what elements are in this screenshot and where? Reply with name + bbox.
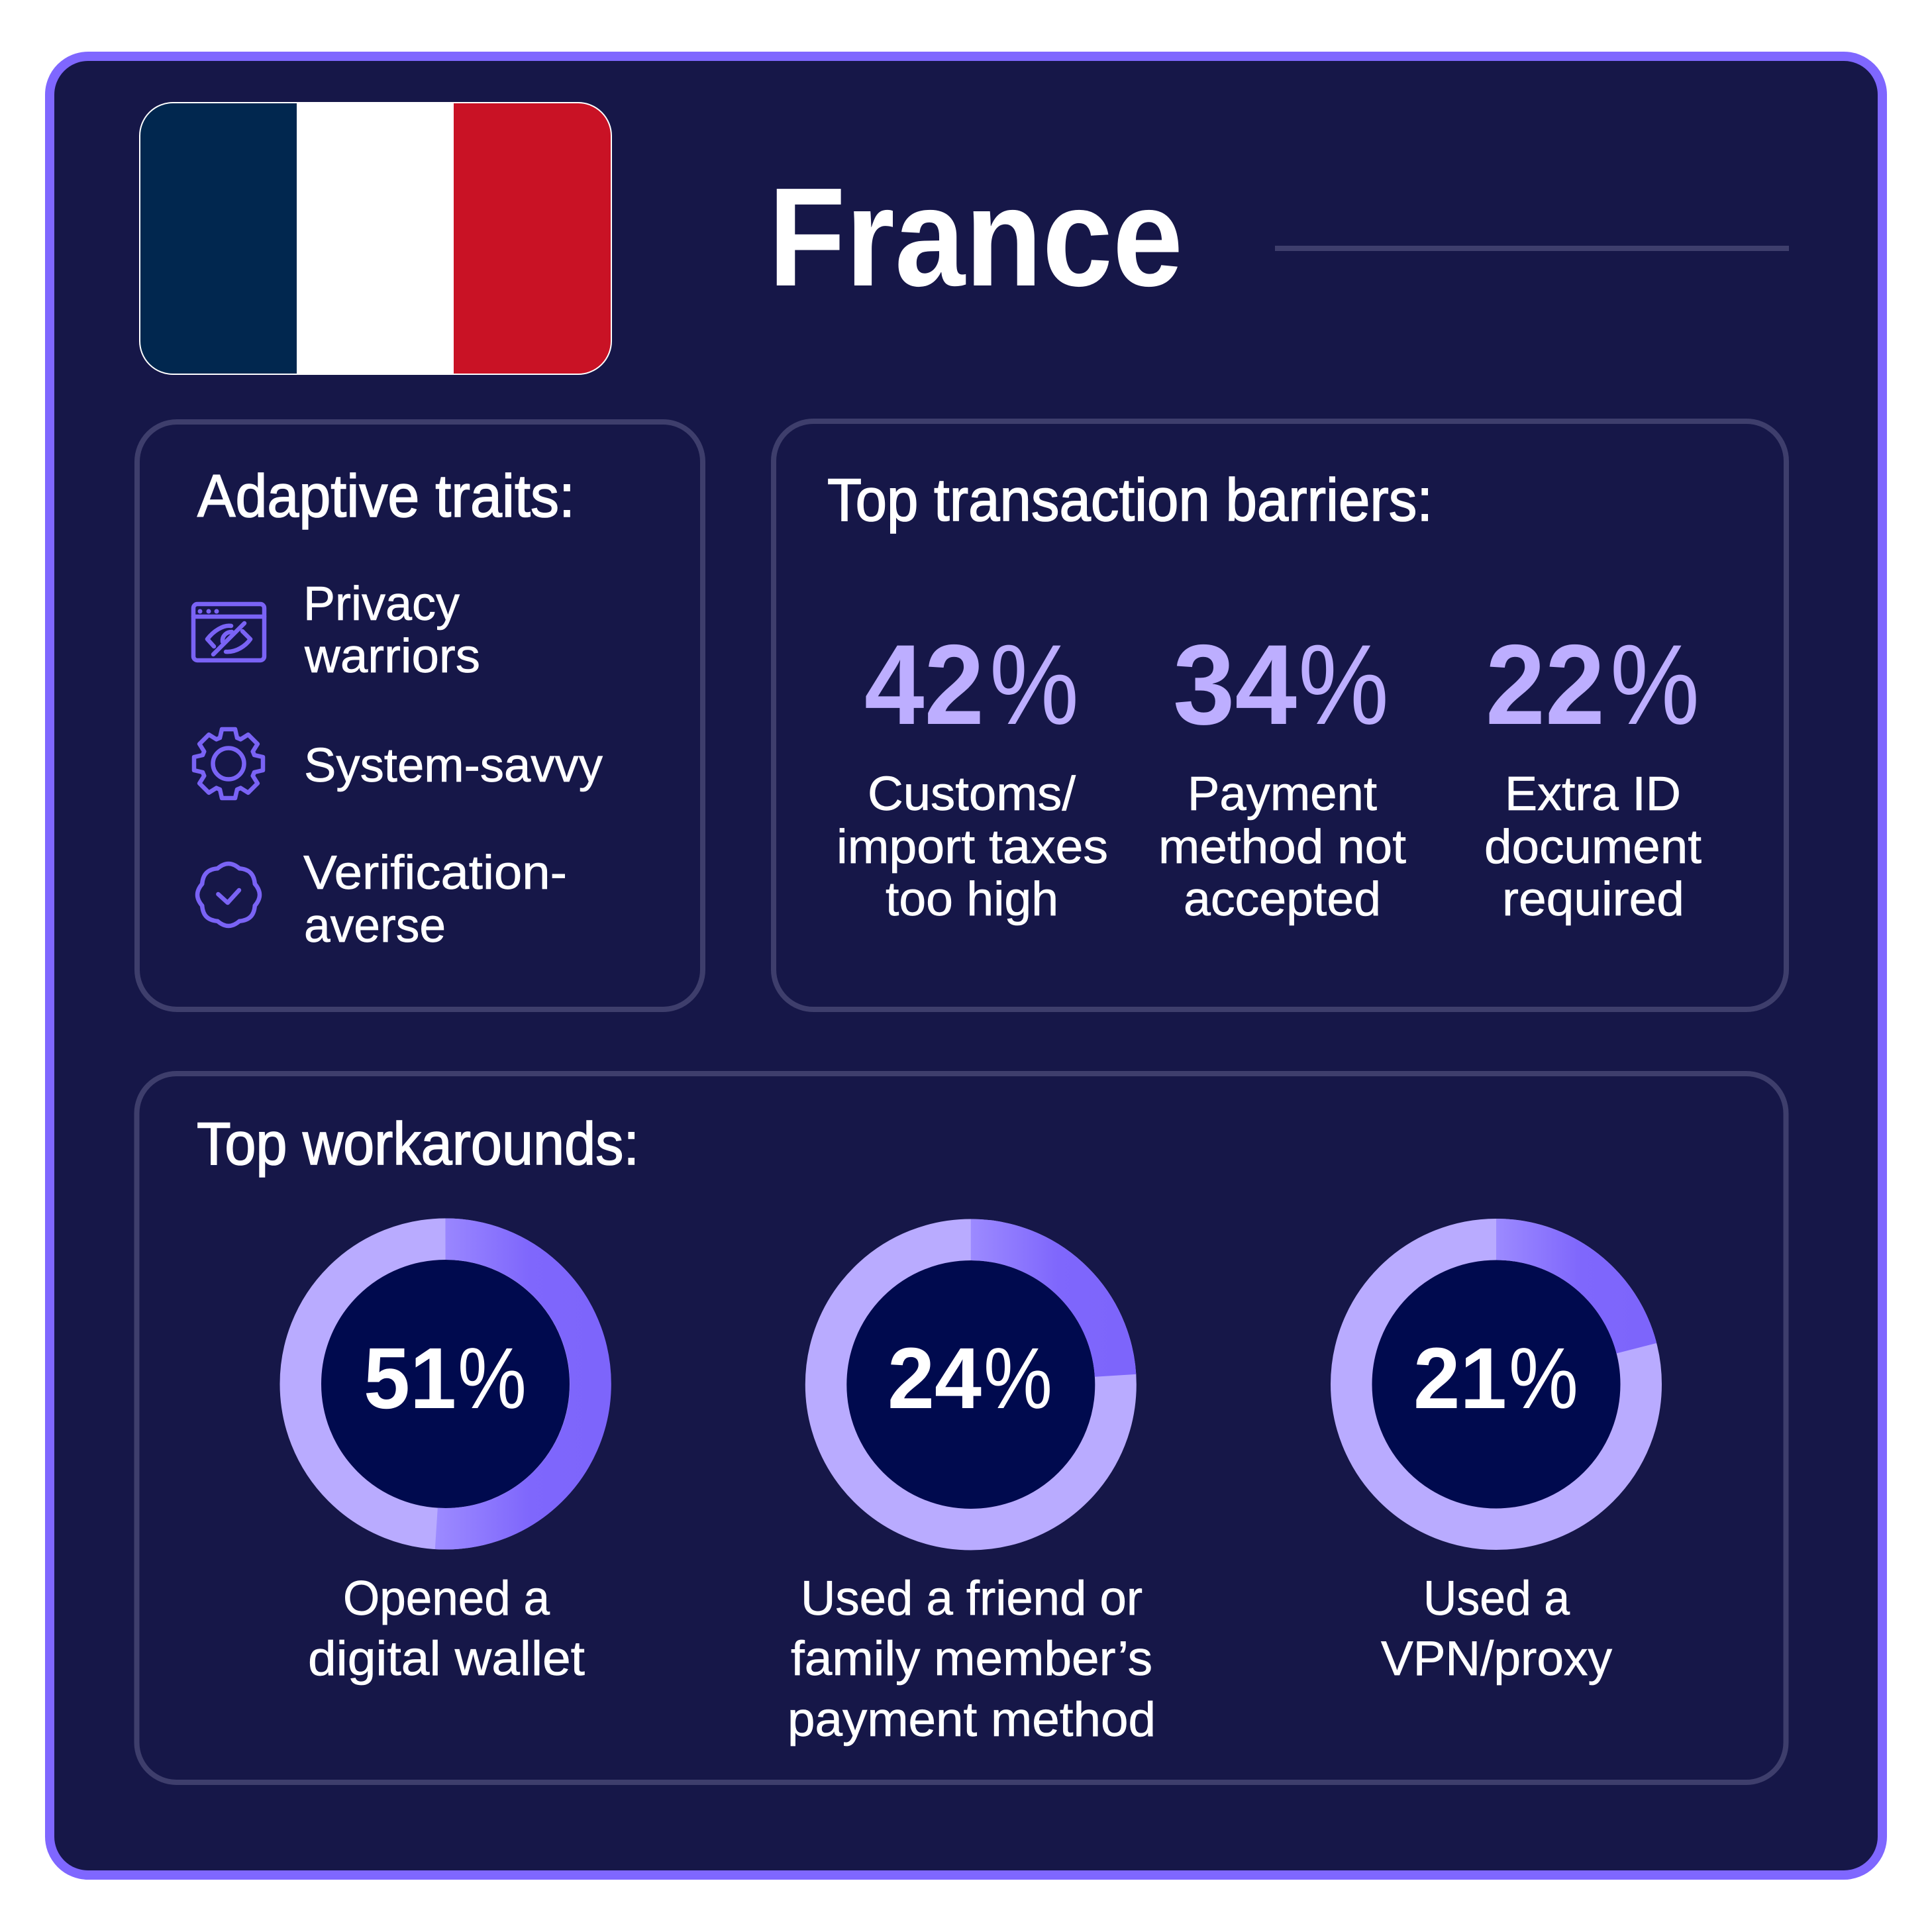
- stat: 42 percent customs: 42: [864, 621, 984, 748]
- donut chart: 21 percent: [1351, 1239, 1641, 1529]
- trait: privacy warriors: warriors: [304, 630, 480, 683]
- donut chart: 51 percent: 51: [364, 1329, 456, 1427]
- donut chart: 21 percent: %: [1509, 1329, 1578, 1427]
- stat: 34 percent payment: 34: [1173, 621, 1297, 748]
- stat: 42 percent customs: %: [990, 621, 1079, 748]
- trait: verification-averse: averse: [304, 899, 446, 952]
- panel: top transaction barriers: [774, 421, 1786, 1009]
- flag of France: [140, 103, 611, 374]
- stat: 34 percent payment: method not: [1158, 821, 1406, 874]
- donut chart: 51 percent: %: [458, 1329, 527, 1427]
- stat: 22 percent extra ID: 22: [1486, 621, 1605, 748]
- donut chart: 51 percent: [301, 1239, 591, 1529]
- stat: 34 percent payment: accepted: [1184, 873, 1381, 926]
- label: used a friend or family member's payment method: Used a friend or: [801, 1572, 1143, 1625]
- donut chart: 24 percent: %: [984, 1329, 1052, 1427]
- trait: verification-averse: Verification-: [303, 846, 567, 899]
- panel: adaptive traits: [137, 422, 703, 1009]
- icon: browser window with crossed-out eye: [193, 604, 264, 660]
- label: opened a digital wallet: [308, 1572, 585, 1686]
- trait: system-savvy: System-savvy: [304, 739, 603, 792]
- stat: 22 percent extra ID: document: [1484, 821, 1702, 874]
- stat: 42 percent customs: Customs/: [868, 768, 1076, 821]
- stat: 42 percent customs: [837, 621, 1108, 926]
- heading: top transaction barriers: Top transaction barriers:: [827, 467, 1433, 534]
- stat: 22 percent extra ID: Extra ID: [1505, 768, 1681, 821]
- trait: privacy warriors: [303, 578, 480, 683]
- label: opened a digital wallet: Opened a: [343, 1572, 550, 1625]
- label: opened a digital wallet: digital wallet: [308, 1632, 585, 1686]
- title: France: [768, 158, 1183, 315]
- trait: verification-averse: [303, 846, 567, 952]
- donut chart: 21 percent: 21: [1413, 1329, 1507, 1427]
- stat: 42 percent customs: too high: [886, 873, 1058, 926]
- label: used a VPN/proxy: VPN/proxy: [1381, 1632, 1612, 1686]
- stat: 34 percent payment: [1158, 621, 1406, 926]
- trait: privacy warriors: Privacy: [303, 578, 460, 631]
- donut chart: 24 percent: [826, 1240, 1116, 1529]
- label: used a friend or family member's payment method: [788, 1572, 1156, 1747]
- icon: gear: [194, 729, 263, 798]
- panel: top workarounds: [136, 1074, 1786, 1782]
- label: used a VPN/proxy: [1381, 1572, 1612, 1686]
- stat: 22 percent extra ID: required: [1502, 873, 1684, 926]
- stat: 34 percent payment: %: [1298, 621, 1389, 748]
- stat: 22 percent extra ID: %: [1610, 621, 1700, 748]
- label: used a friend or family member's payment method: payment method: [788, 1693, 1156, 1747]
- icon: verified badge: [197, 864, 260, 926]
- donut chart: 24 percent: 24: [888, 1329, 982, 1427]
- stat: 34 percent payment: Payment: [1188, 768, 1377, 821]
- heading: adaptive traits: Adaptive traits:: [197, 463, 575, 530]
- stat: 22 percent extra ID: [1484, 621, 1702, 926]
- stat: 42 percent customs: import taxes: [837, 821, 1108, 874]
- label: used a friend or family member's payment method: family member’s: [791, 1632, 1152, 1686]
- label: used a VPN/proxy: Used a: [1423, 1572, 1570, 1625]
- heading: top workarounds: Top workarounds:: [197, 1111, 639, 1178]
